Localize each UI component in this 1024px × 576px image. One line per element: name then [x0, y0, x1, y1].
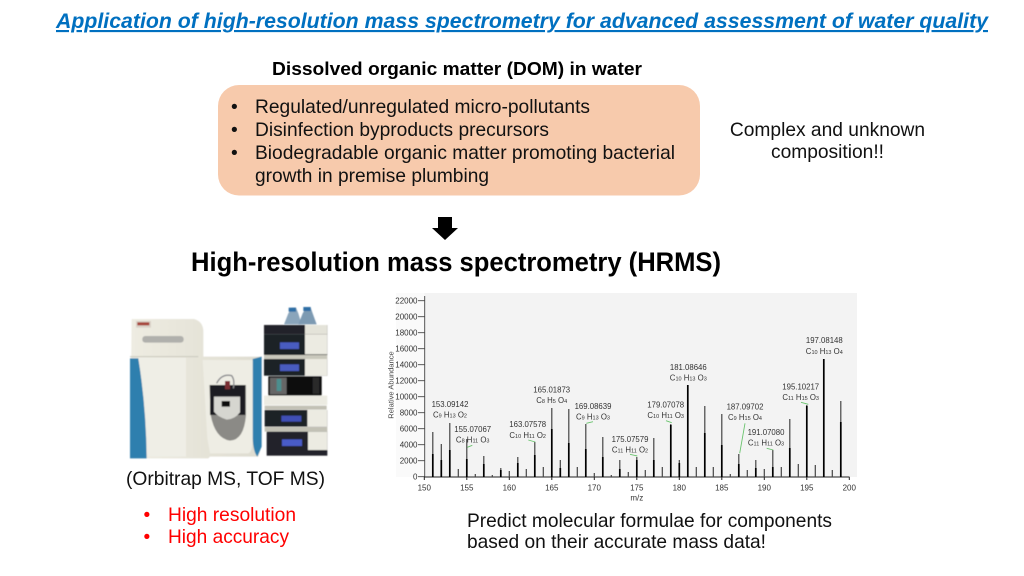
x axis: m/z	[630, 494, 643, 502]
caption: predict molecular formulae: Predict molecular formulae for components	[467, 511, 832, 532]
caption: predict molecular formulae: based on their accurate mass data!	[467, 532, 766, 553]
y axis: 12000	[395, 376, 418, 386]
peak annotations: 155.07067	[454, 425, 491, 434]
HPLC stack	[264, 325, 327, 334]
peak annotations: C8 H11 O3	[456, 436, 489, 444]
bullet list: DOM components: •	[231, 97, 238, 118]
y axis: 22000	[395, 296, 418, 306]
y axis: 6000	[400, 424, 418, 434]
bullet list: DOM components: growth in premise plumbing	[255, 166, 489, 187]
caption: instrument types: (Orbitrap MS, TOF MS)	[126, 469, 325, 490]
peak annotations: C10 H11 O3	[647, 411, 684, 420]
bullet list: DOM components	[231, 97, 675, 187]
y axis: 14000	[395, 360, 418, 370]
x axis: 150	[418, 484, 432, 492]
peak annotations: C10 H13 O3	[670, 374, 707, 382]
peak annotations: 163.07578	[509, 420, 546, 429]
bullet list: DOM components: Regulated/unregulated micro-pollutants	[255, 97, 590, 118]
peak annotations: 181.08646	[670, 363, 707, 372]
panel: DOM components	[218, 85, 700, 196]
leader lines	[467, 402, 808, 456]
peak annotations	[432, 336, 843, 454]
y axis: 18000	[395, 328, 418, 338]
x axis: 200	[843, 484, 857, 492]
bullet list: DOM components: Biodegradable organic matter promoting bacterial	[255, 143, 675, 164]
y axis: 8000	[400, 408, 418, 418]
side note: complex composition: composition!!	[771, 142, 884, 163]
title: Application of high-resolution mass spectrometry for advanced assessment of water quality	[55, 9, 989, 33]
y axis: 16000	[395, 344, 418, 354]
x axis: 155	[460, 484, 474, 492]
y axis: 20000	[395, 312, 418, 322]
arrow: down	[432, 217, 458, 240]
side note: complex composition	[730, 120, 925, 163]
list: HRMS advantages: High resolution	[168, 505, 296, 526]
peak annotations: 153.09142	[432, 400, 468, 409]
peak annotations: 197.08148	[806, 336, 843, 345]
y axis	[386, 296, 425, 482]
peak annotations: 169.08639	[575, 402, 611, 411]
peak annotations: C9 H13 O2	[433, 410, 467, 420]
list: HRMS advantages: •	[144, 505, 150, 526]
peak annotations: C9 H13 O3	[576, 412, 610, 422]
peak annotations: C10 H13 O4	[806, 347, 843, 356]
side note: complex composition: Complex and unknown	[730, 120, 925, 141]
x axis: 185	[715, 484, 729, 492]
bottles	[284, 308, 302, 324]
bullet list: DOM components: •	[231, 120, 238, 141]
bullet list: DOM components: •	[231, 143, 238, 164]
list: HRMS advantages: •	[144, 527, 150, 548]
heading: dissolved organic matter: Dissolved organic matter (DOM) in water	[272, 58, 642, 79]
x axis: 190	[758, 484, 772, 492]
peak annotations: 165.01873	[533, 386, 570, 394]
bullet list: DOM components: Disinfection byproducts precursors	[255, 120, 549, 141]
peak annotations: C8 H5 O4	[536, 396, 567, 405]
y axis: 10000	[395, 392, 418, 402]
x axis: 165	[545, 484, 559, 492]
peak annotations: C9 H15 O4	[728, 413, 762, 422]
peak annotations: C11 H11 O3	[748, 438, 784, 448]
peak annotations: 191.07080	[748, 428, 785, 437]
x axis: 180	[673, 484, 687, 492]
heading: HRMS: High-resolution mass spectrometry (HRMS)	[191, 247, 721, 277]
peak annotations: 175.07579	[612, 435, 648, 444]
y axis: 0	[413, 472, 418, 482]
list: HRMS advantages	[144, 505, 296, 548]
spectrum peaks	[433, 359, 841, 477]
y axis: 4000	[400, 440, 418, 450]
x axis: 170	[588, 484, 602, 492]
caption: predict molecular formulae	[467, 511, 832, 553]
x axis	[418, 477, 857, 502]
list: HRMS advantages: High accuracy	[168, 527, 289, 548]
image: mass spectrometer instrument	[129, 306, 328, 460]
x axis: 160	[503, 484, 517, 492]
peak annotations: C11 H15 O3	[782, 393, 819, 402]
peak annotations: C11 H11 O2	[612, 446, 648, 454]
chart: mass spectrum	[386, 293, 857, 502]
x axis: 175	[630, 484, 644, 492]
x axis: 195	[800, 484, 814, 492]
peak annotations: 179.07078	[647, 400, 684, 410]
peak annotations: 187.09702	[727, 402, 763, 412]
y axis: Relative Abundance	[386, 351, 396, 419]
y axis: 2000	[400, 456, 418, 466]
peak annotations: C10 H11 O2	[509, 431, 546, 440]
peak annotations: 195.10217	[782, 382, 819, 392]
